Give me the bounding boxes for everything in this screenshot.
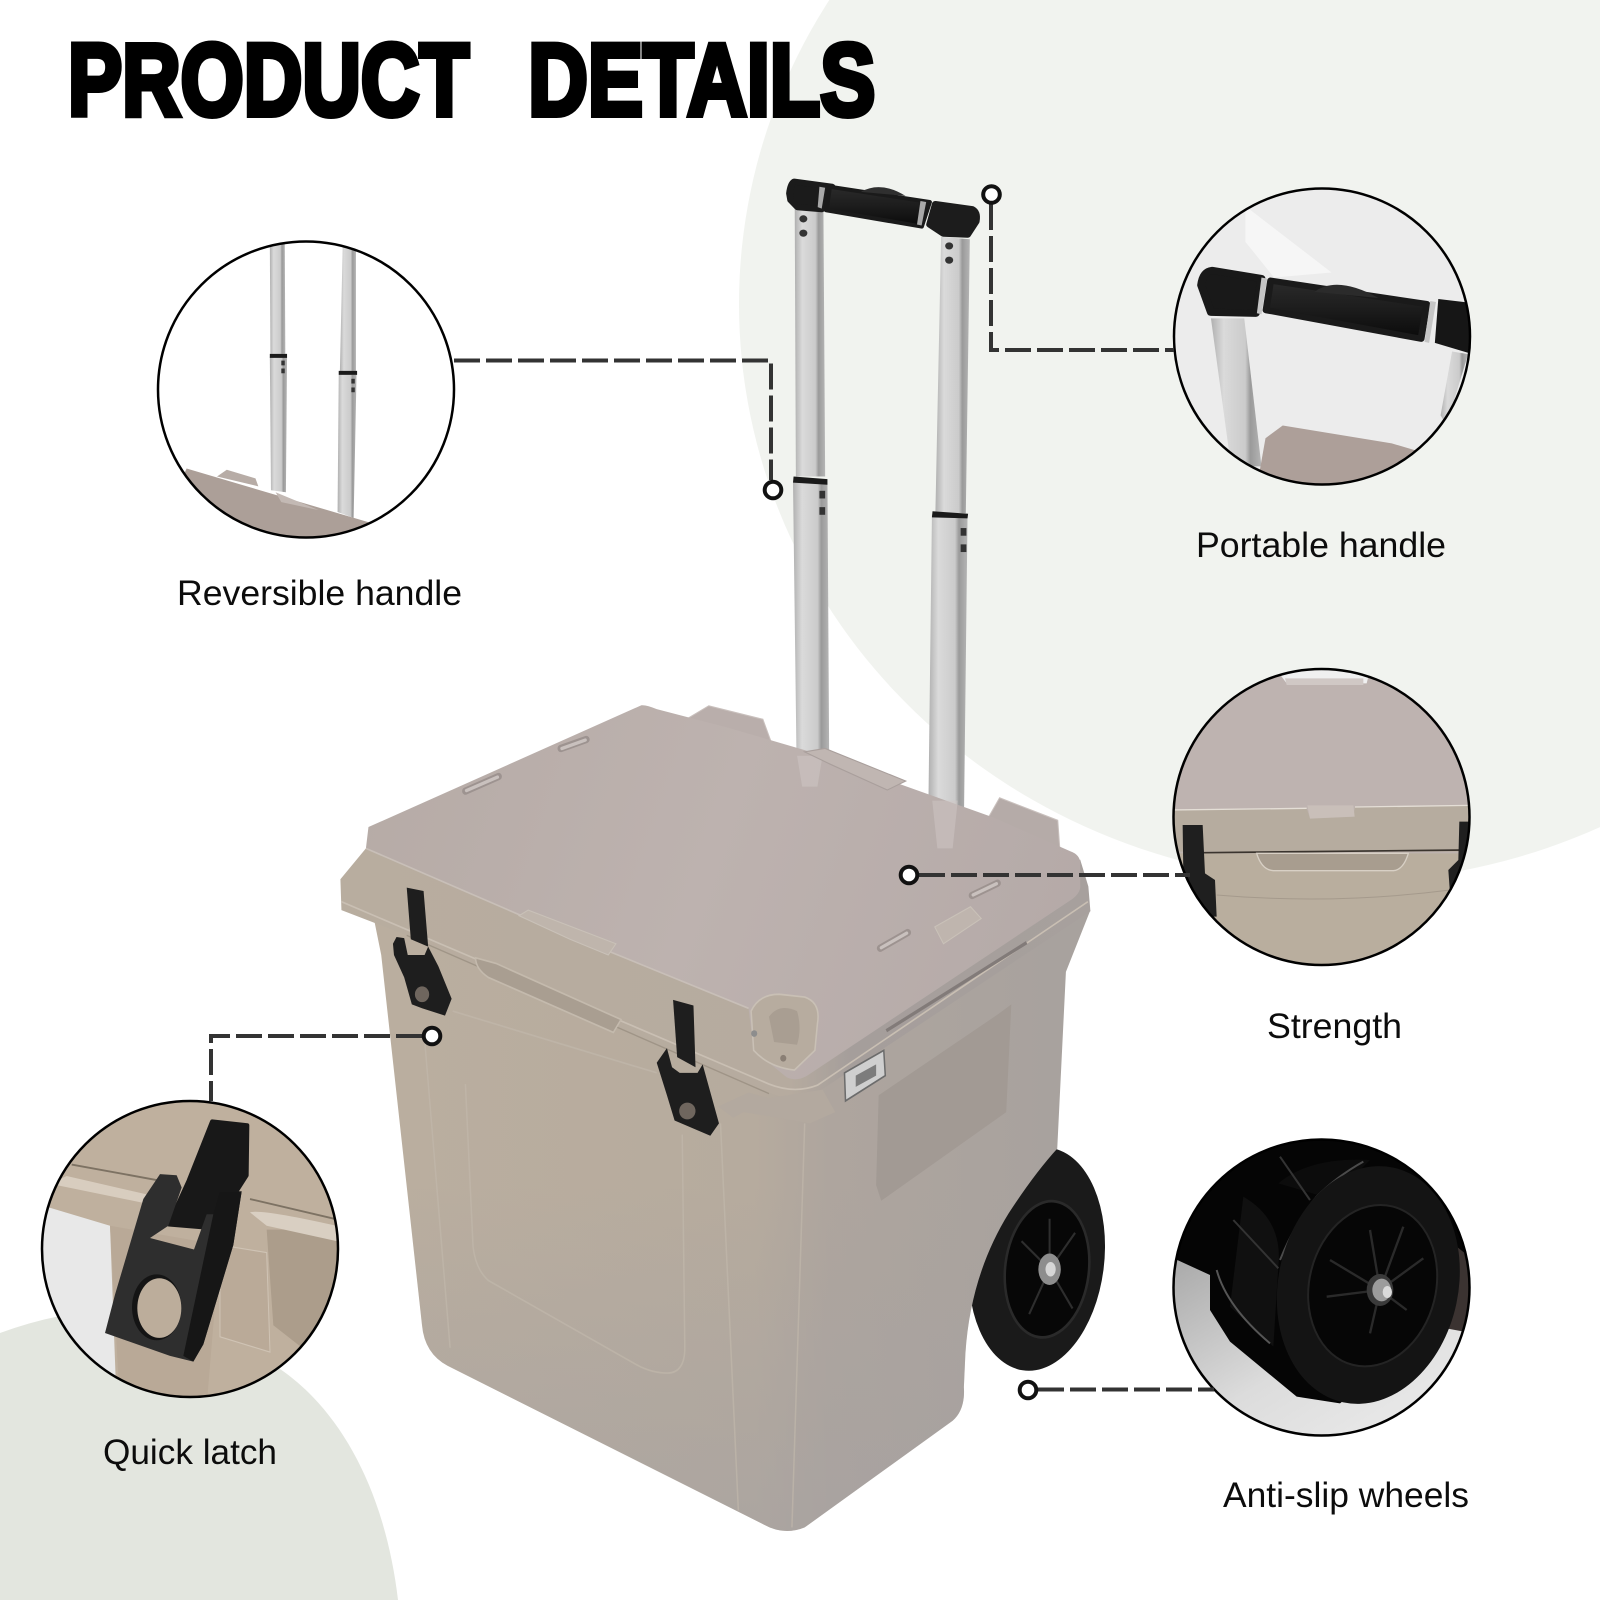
- leader: portable handle: [983, 186, 1174, 350]
- detail circle: reversible handle: [158, 241, 454, 554]
- detail circle: quick latch: [33, 1092, 347, 1406]
- detail circle: strength: [1170, 660, 1473, 967]
- label: reversible handle: Reversible handle: [177, 574, 462, 613]
- background shape: sage circle bottom left: [0, 1314, 398, 1600]
- leader: reversible handle: [454, 360, 781, 498]
- label: quick latch: Quick latch: [103, 1433, 277, 1472]
- leader: strength: [901, 867, 1190, 883]
- lid slots: [465, 739, 998, 948]
- label: strength: Strength: [1267, 1007, 1402, 1046]
- title: DETAILS: [528, 23, 875, 137]
- leader: anti-slip wheels: [1020, 1382, 1214, 1398]
- left latch: [393, 888, 452, 1016]
- side grip recess: [876, 1004, 1011, 1201]
- lid top surface: [366, 705, 1080, 1079]
- front panel outlines: [425, 1011, 805, 1527]
- back lid tab: [805, 748, 906, 790]
- cooler body shell: [371, 904, 1090, 1531]
- back hinges: [686, 706, 772, 743]
- collar flare: [718, 1090, 835, 1123]
- lid reflections under the handle tubes: [797, 756, 958, 848]
- telescoping trolley handle: [790, 182, 977, 808]
- background shape: large pale circle top right: [739, 0, 1600, 882]
- leader: quick latch: [211, 1028, 440, 1101]
- lid raised tabs: [519, 910, 616, 955]
- title: [68, 23, 875, 137]
- label: portable handle: Portable handle: [1196, 526, 1446, 565]
- metal plate: [844, 1050, 885, 1101]
- lid band: [340, 848, 1090, 1098]
- detail circle: anti-slip wheels: [1170, 1140, 1481, 1440]
- front carry handle: [476, 958, 621, 1032]
- label: anti-slip wheels: Anti-slip wheels: [1223, 1476, 1469, 1515]
- wheel on the cooler: [956, 1138, 1118, 1381]
- title: PRODUCT: [68, 23, 469, 137]
- corner cup: [751, 994, 818, 1070]
- cooler body and lid: [340, 705, 1090, 1531]
- detail circle: portable handle: [1174, 186, 1472, 487]
- right latch: [657, 1000, 719, 1136]
